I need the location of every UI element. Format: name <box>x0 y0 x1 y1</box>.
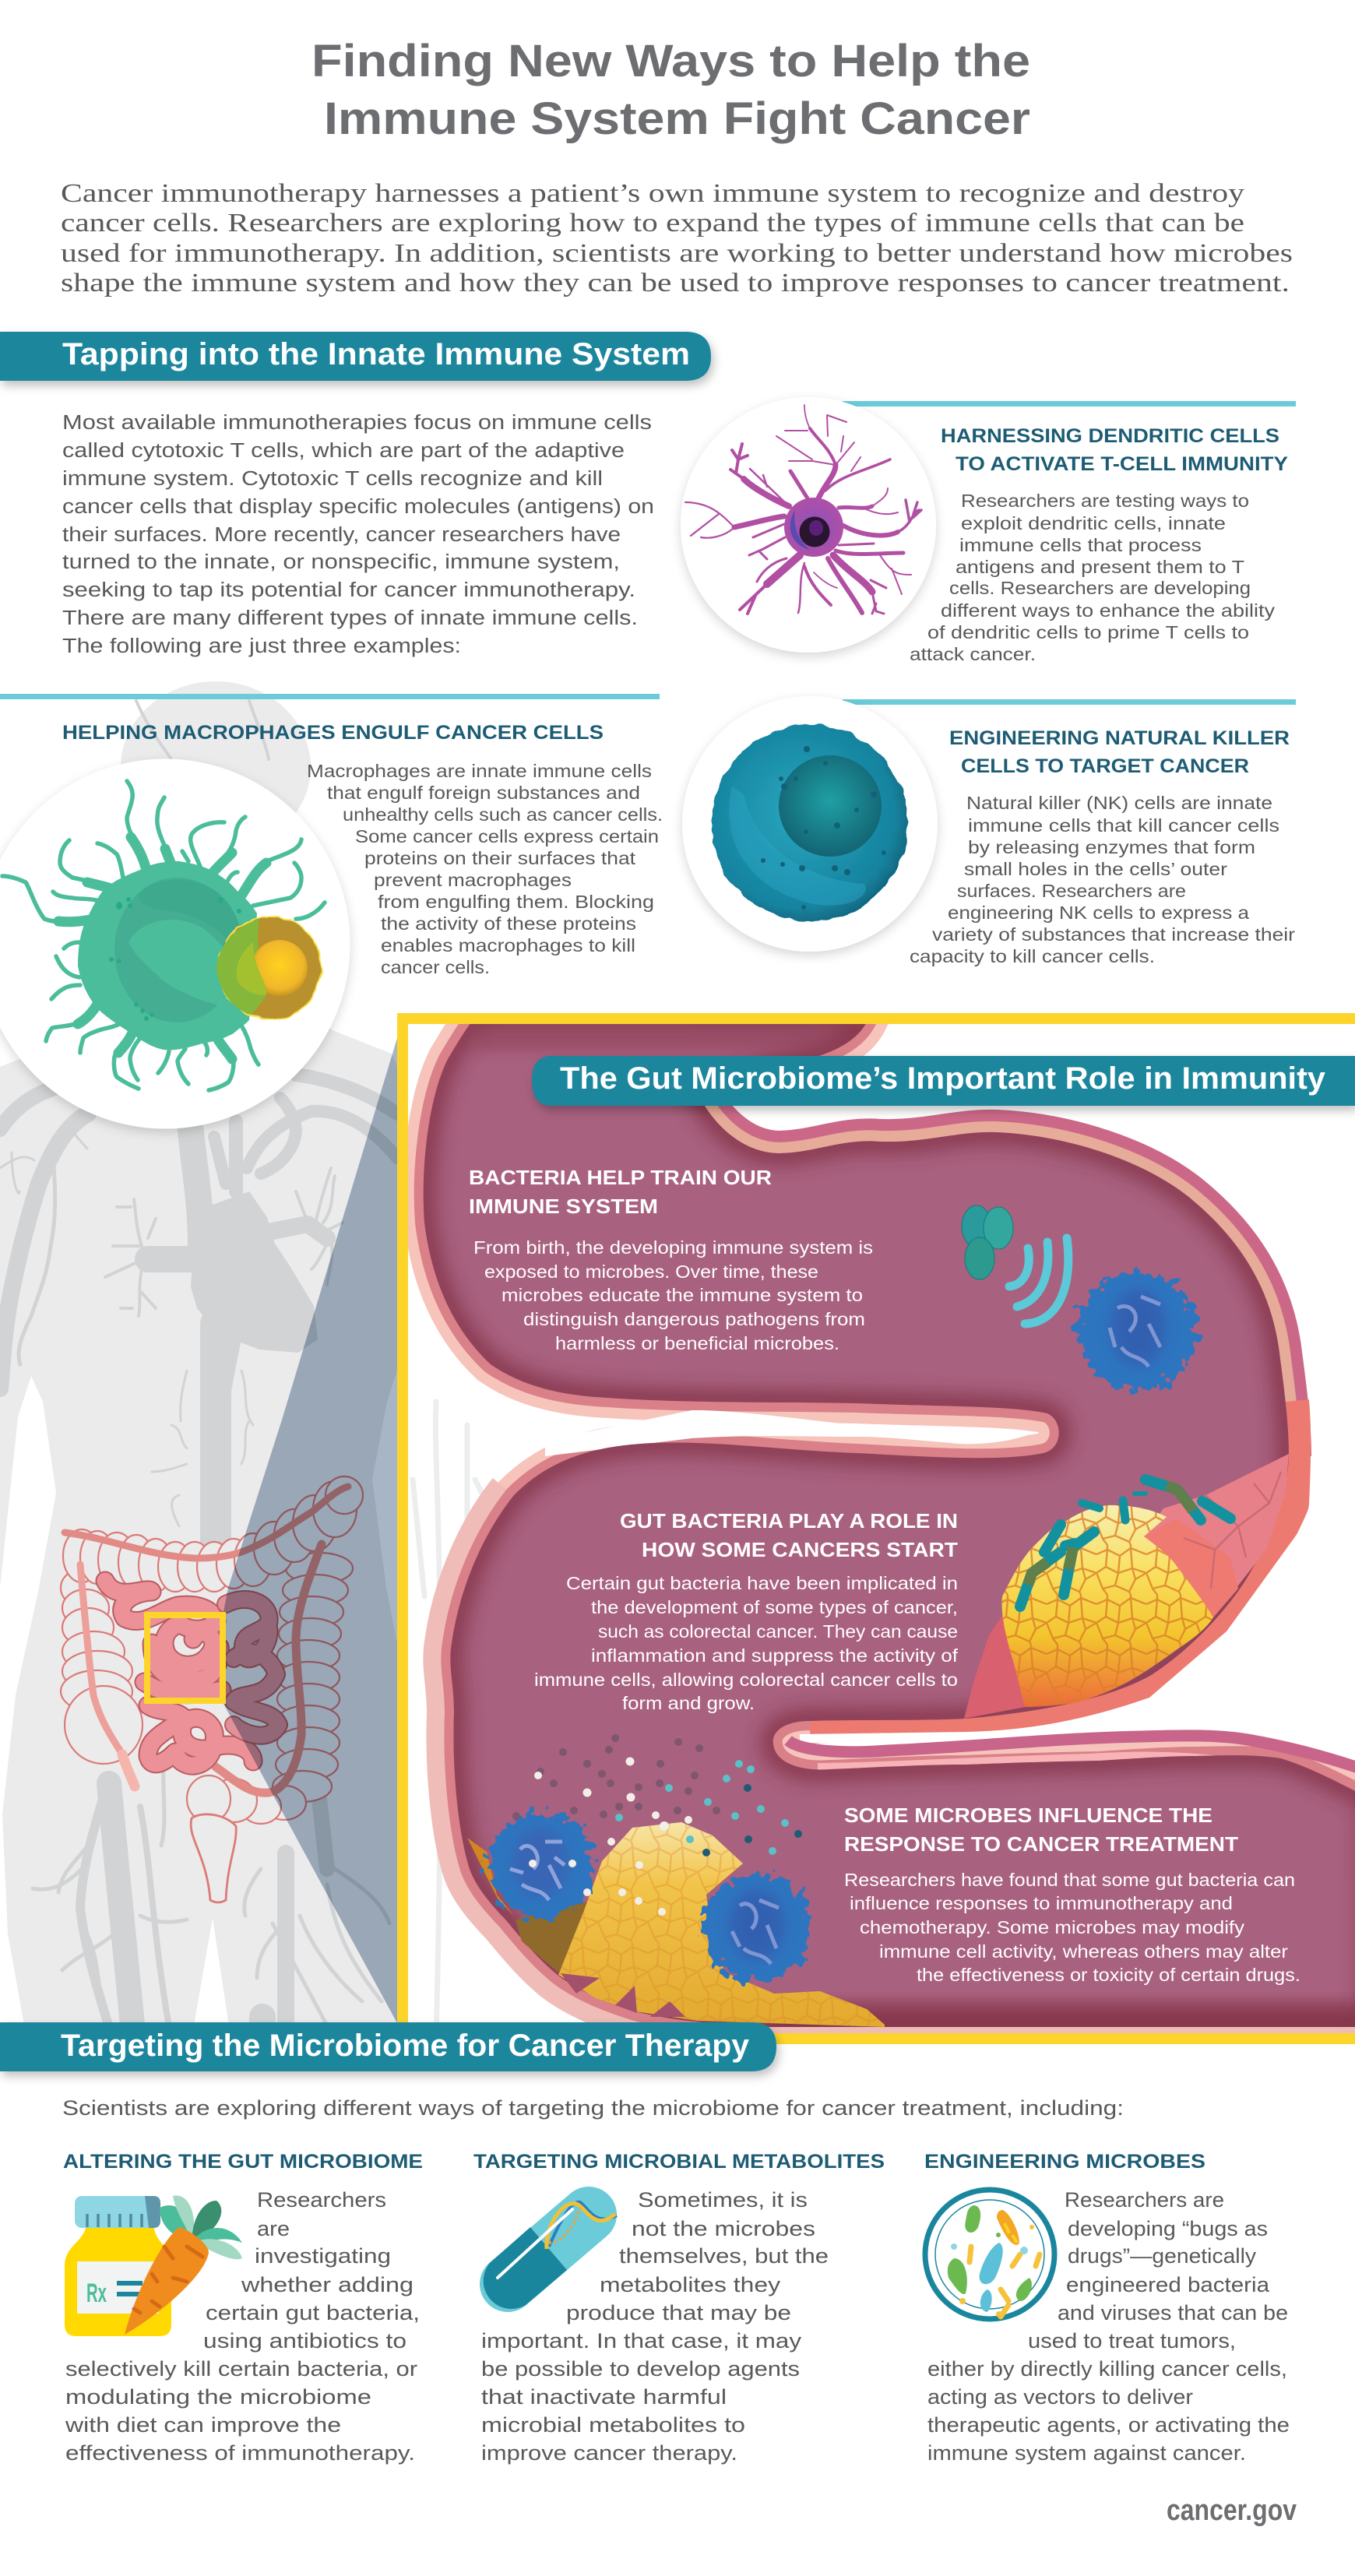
text block: microbes influence treatment response: immune cell activity, whereas others may alter <box>879 1941 1288 1962</box>
text block: natural killer cells body: Natural killer (NK) cells are innate <box>966 793 1272 813</box>
text block: altering body: using antibiotics to <box>203 2329 406 2353</box>
text block: innate immune intro: Most available immunotherapies focus on immune cells <box>62 412 652 434</box>
icon: dendritic cell <box>685 405 921 614</box>
heading: natural killer cells: ENGINEERING NATURAL KILLER <box>949 727 1290 749</box>
text block: bacteria help train our immune system: distinguish dangerous pathogens from <box>523 1309 865 1329</box>
text block: macrophages body: that engulf foreign substances and <box>327 783 640 803</box>
title: Immune System Fight Cancer <box>324 93 1030 144</box>
text block: bacteria help train our immune system: microbes educate the immune system to <box>502 1285 863 1305</box>
panel: natural killer cells <box>682 696 1296 966</box>
panel: targeting microbial metabolites <box>473 2151 885 2465</box>
text block: gut bacteria and cancer start: inflammation and suppress the activity of <box>591 1645 959 1666</box>
illustration: immune cells attacking tumor <box>467 1734 885 2027</box>
gut interior <box>389 1005 1355 2040</box>
icon: medicine bottle and carrot: Rx <box>86 2279 107 2308</box>
text block: dendritic cells body: attack cancer. <box>910 644 1036 664</box>
text block: metabolites body: improve cancer therapy. <box>481 2441 737 2465</box>
text block: bacteria help train our immune system <box>469 1166 873 1353</box>
text block: natural killer cells body: surfaces. Researchers are <box>957 881 1186 901</box>
text block: natural killer cells body: engineering NK cells to express a <box>948 903 1250 923</box>
text block: microbes influence treatment response: Researchers have found that some gut bacteria can <box>844 1870 1295 1890</box>
text block: innate immune intro: The following are just three examples: <box>62 635 461 657</box>
text block: metabolites body: that inactivate harmful <box>481 2385 727 2409</box>
panel: gut microbiome frame <box>389 1005 1355 2040</box>
text block: metabolites body: be possible to develop agents <box>481 2357 800 2381</box>
text block: innate immune intro: called cytotoxic T cells, which are part of the adaptive <box>62 440 625 462</box>
text block: metabolites body <box>481 2188 829 2465</box>
text block: innate immune intro: There are many different types of innate immune cells. <box>62 607 638 629</box>
text block: altering body: whether adding <box>241 2273 414 2296</box>
text block: metabolites body: themselves, but the <box>619 2244 829 2268</box>
text block: gut bacteria and cancer start: immune cells, allowing colorectal cancer cells to <box>534 1670 958 1690</box>
text block: altering body: certain gut bacteria, <box>206 2301 420 2324</box>
text block: altering body: modulating the microbiome <box>65 2385 371 2409</box>
text block: altering body: with diet can improve the <box>65 2413 341 2437</box>
text block: microbes influence treatment response: RESPONSE TO CANCER TREATMENT <box>844 1832 1238 1856</box>
text block: dendritic cells body: cells. Researchers are developing <box>949 578 1251 598</box>
panel: altering the gut microbiome: ALTERING THE GUT MICROBIOME <box>63 2151 423 2173</box>
icon: petri dish with microbes <box>925 2190 1054 2319</box>
panel: dendritic cells <box>681 397 1296 664</box>
magnification wedge <box>223 1038 397 2023</box>
text block: dendritic cells body: exploit dendritic cells, innate <box>961 513 1226 533</box>
text block: engineering body <box>927 2188 1290 2465</box>
banner: gut microbiome: The Gut Microbiome’s Important Role in Immunity <box>560 1061 1326 1096</box>
text block: macrophages body: the activity of these proteins <box>381 913 636 934</box>
text block: engineering body: used to treat tumors, <box>1028 2329 1236 2353</box>
text block: metabolites body: microbial metabolites to <box>481 2413 745 2437</box>
text block: metabolites body: produce that may be <box>566 2301 791 2324</box>
text block: dendritic cells body: immune cells that process <box>959 535 1202 555</box>
text block: gut bacteria and cancer start: such as colorectal cancer. They can cause <box>598 1621 958 1642</box>
text block: macrophages body: Macrophages are innate immune cells <box>307 761 652 781</box>
text block: natural killer cells body <box>910 793 1295 966</box>
title <box>311 36 1030 144</box>
text block: metabolites body: metabolites they <box>600 2273 781 2296</box>
text block: microbes influence treatment response: SOME MICROBES INFLUENCE THE <box>844 1804 1212 1827</box>
illustration: large and small intestine <box>61 1476 363 1902</box>
text block: microbes influence treatment response <box>844 1804 1300 1985</box>
text block: dendritic cells body: of dendritic cells to prime T cells to <box>927 622 1249 642</box>
text block: engineering body: developing “bugs as <box>1068 2217 1268 2240</box>
text block: natural killer cells body: variety of substances that increase their <box>932 924 1295 945</box>
banner: targeting the microbiome <box>0 2022 776 2071</box>
text block: altering body: are <box>257 2217 290 2240</box>
text block: bacteria help train our immune system: BACTERIA HELP TRAIN OUR <box>469 1166 772 1189</box>
highlight box on intestine <box>147 1615 223 1701</box>
panel: engineering microbes <box>924 2151 1290 2465</box>
text block: metabolites body: not the microbes <box>632 2217 815 2240</box>
heading: macrophages: HELPING MACROPHAGES ENGULF CANCER CELLS <box>62 722 604 744</box>
text block: engineering body: Researchers are <box>1065 2188 1224 2212</box>
text block: macrophages body: prevent macrophages <box>374 870 572 890</box>
text block: metabolites body: Sometimes, it is <box>638 2188 808 2212</box>
text block: natural killer cells body: by releasing enzymes that form <box>968 837 1255 857</box>
gut wall <box>424 1012 1355 2036</box>
heading: dendritic cells: HARNESSING DENDRITIC CELLS <box>941 425 1279 447</box>
illustration: microbes signalling to immune cell <box>962 1205 1196 1390</box>
intro paragraph: cancer cells. Researchers are exploring how to expand the types of immune cells that can be <box>61 209 1244 238</box>
text block: altering body: effectiveness of immunotherapy. <box>65 2441 415 2465</box>
panel: targeting microbial metabolites: TARGETING MICROBIAL METABOLITES <box>473 2151 885 2173</box>
body silhouette with arteries <box>0 681 397 2044</box>
text block: macrophages body: proteins on their surfaces that <box>364 848 636 868</box>
heading: natural killer cells: CELLS TO TARGET CANCER <box>961 755 1249 777</box>
text block: gut bacteria and cancer start: HOW SOME CANCERS START <box>642 1538 958 1561</box>
text block: macrophages body <box>307 761 663 977</box>
text block: engineering body: and viruses that can be <box>1058 2301 1288 2324</box>
icon: capsule with DNA <box>484 2202 617 2309</box>
text block: macrophages body: unhealthy cells such as cancer cells. <box>343 804 663 825</box>
intro paragraph: Cancer immunotherapy harnesses a patient’s own immune system to recognize and destroy <box>61 179 1244 208</box>
text block: altering body: investigating <box>255 2244 391 2268</box>
icon: medicine bottle and carrot <box>65 2195 242 2336</box>
heading: natural killer cells <box>949 727 1290 777</box>
text block: gut bacteria and cancer start <box>534 1509 959 1713</box>
text block: natural killer cells body: small holes in the cells’ outer <box>964 859 1227 879</box>
text block: metabolites body: important. In that case, it may <box>481 2329 802 2353</box>
logo: cancer.gov: cancer.gov <box>1167 2494 1297 2527</box>
text block: dendritic cells body: antigens and present them to T <box>956 557 1244 577</box>
text block: innate immune intro: immune system. Cytotoxic T cells recognize and kill <box>62 468 603 490</box>
panel: altering the gut microbiome <box>63 2151 423 2465</box>
intro paragraph <box>61 179 1293 297</box>
text block: dendritic cells body: Researchers are testing ways to <box>961 491 1249 511</box>
text block: macrophages body: cancer cells. <box>381 957 490 977</box>
text block: macrophages body: from engulfing them. Blocking <box>378 892 654 912</box>
text block: gut bacteria and cancer start: GUT BACTERIA PLAY A ROLE IN <box>620 1509 958 1533</box>
text block: engineering body: therapeutic agents, or activating the <box>927 2413 1290 2437</box>
text block: microbes influence treatment response: influence responses to immunotherapy and <box>850 1893 1233 1913</box>
text block: altering body: Researchers <box>257 2188 386 2212</box>
text block: natural killer cells body: immune cells that kill cancer cells <box>968 815 1279 836</box>
banner: innate immune system <box>0 332 711 381</box>
text block: innate immune intro: cancer cells that display specific molecules (antigens) on <box>62 496 654 518</box>
text block: macrophages body: Some cancer cells express certain <box>355 826 659 846</box>
text block: bacteria help train our immune system: From birth, the developing immune system is <box>473 1237 873 1258</box>
text block: engineering body: acting as vectors to deliver <box>927 2385 1193 2409</box>
icon: natural killer cell <box>712 725 908 921</box>
text block: engineering body: engineered bacteria <box>1066 2273 1270 2296</box>
text block: altering body <box>65 2188 420 2465</box>
text block: engineering body: immune system against cancer. <box>927 2441 1246 2465</box>
text block: bacteria help train our immune system: exposed to microbes. Over time, these <box>484 1262 818 1282</box>
text block: engineering body: either by directly killing cancer cells, <box>927 2357 1287 2381</box>
banner: innate immune system: Tapping into the Innate Immune System <box>62 337 690 371</box>
text block: innate immune intro: their surfaces. More recently, cancer researchers have <box>62 524 621 546</box>
heading: dendritic cells <box>941 425 1288 475</box>
lead-in sentence: Scientists are exploring different ways of targeting the microbiome for cancer treatment, including: <box>62 2096 1124 2120</box>
banner: gut microbiome <box>532 1056 1355 1106</box>
panel: macrophages <box>0 694 663 1129</box>
arteries and heart <box>0 701 397 2040</box>
text block: gut bacteria and cancer start: Certain gut bacteria have been implicated in <box>566 1573 958 1593</box>
scattered molecules <box>512 1734 802 1916</box>
icon: macrophage engulfing cancer cell <box>2 781 325 1090</box>
panel: engineering microbes: ENGINEERING MICROBES <box>924 2151 1205 2173</box>
text block: dendritic cells body: different ways to enhance the ability <box>941 600 1275 621</box>
text block: dendritic cells body <box>910 491 1275 664</box>
banner: targeting the microbiome: Targeting the Microbiome for Cancer Therapy <box>61 2029 750 2063</box>
intro paragraph: shape the immune system and how they can be used to improve responses to cancer treatment. <box>61 269 1290 297</box>
text block: engineering body: drugs”—genetically <box>1068 2244 1257 2268</box>
title: Finding New Ways to Help the <box>311 36 1030 86</box>
heading: dendritic cells: TO ACTIVATE T-CELL IMMUNITY <box>956 453 1288 475</box>
text block: bacteria help train our immune system: IMMUNE SYSTEM <box>469 1195 658 1218</box>
text block: microbes influence treatment response: the effectiveness or toxicity of certain drugs. <box>917 1965 1300 1985</box>
text block: bacteria help train our immune system: harmless or beneficial microbes. <box>555 1333 839 1353</box>
intro paragraph: used for immunotherapy. In addition, scientists are working to better understand how microbes <box>61 239 1293 268</box>
text block: natural killer cells body: capacity to kill cancer cells. <box>910 946 1155 966</box>
text block: gut bacteria and cancer start: the development of some types of cancer, <box>591 1597 958 1617</box>
text block: innate immune intro <box>62 412 654 657</box>
illustration: colorectal tumor with bacteria <box>964 1454 1289 1719</box>
text block: microbes influence treatment response: chemotherapy. Some microbes may modify <box>860 1917 1244 1937</box>
text block: gut bacteria and cancer start: form and grow. <box>622 1693 755 1713</box>
text block: innate immune intro: seeking to tap its potential for cancer immunotherapy. <box>62 579 635 601</box>
text block: innate immune intro: turned to the innate, or nonspecific, immune system, <box>62 551 620 573</box>
text block: altering body: selectively kill certain bacteria, or <box>65 2357 417 2381</box>
text block: macrophages body: enables macrophages to kill <box>381 935 635 955</box>
